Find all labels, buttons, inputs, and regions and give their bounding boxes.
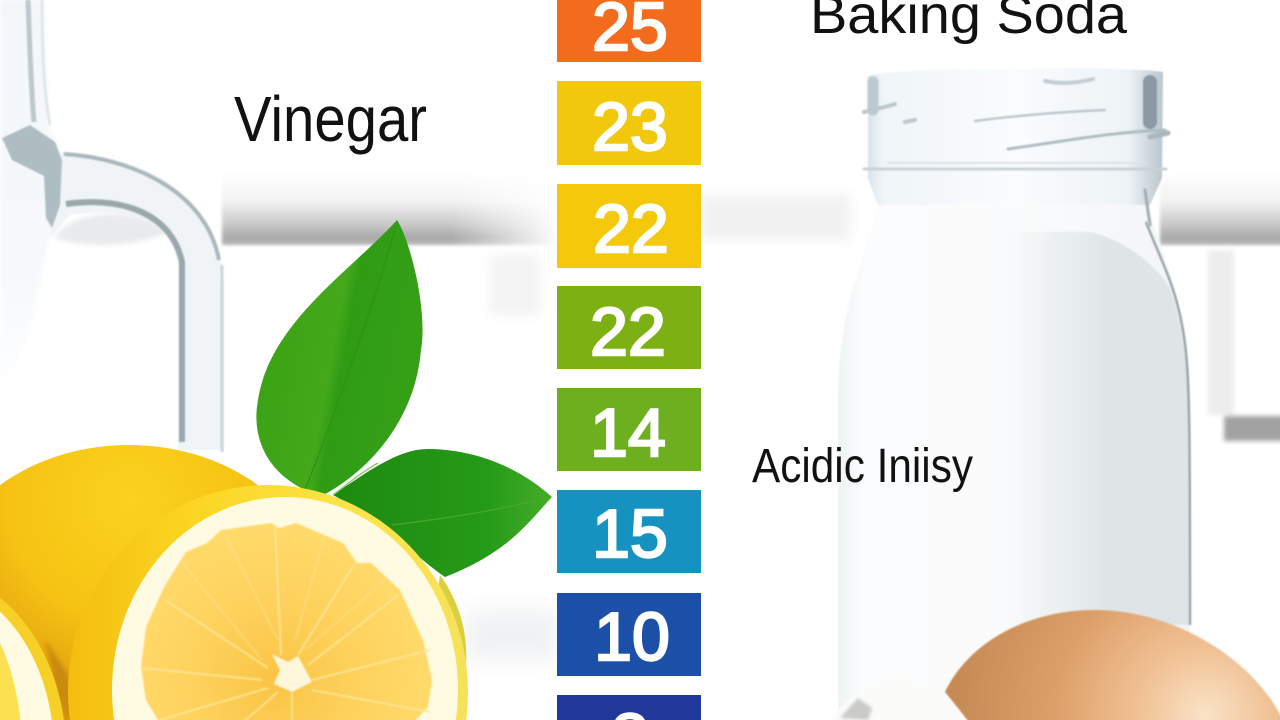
jar body bbox=[838, 205, 1190, 720]
scale block 22 yellow bbox=[557, 184, 701, 268]
icon: cut lemon half bbox=[68, 485, 468, 720]
vertical colour scale of numbers bbox=[557, 0, 701, 720]
icon: green leaves bbox=[256, 220, 552, 577]
scale block 15 bbox=[557, 490, 701, 573]
scale block 23: 23 bbox=[592, 89, 668, 165]
icon: glass jar of baking soda bbox=[838, 68, 1190, 720]
leaf: upper bbox=[256, 220, 423, 496]
scale block 22 green bbox=[557, 286, 701, 370]
callout text: Acidic Iniisy: Acidic Iniisy bbox=[752, 440, 973, 493]
scale block 22 green: 22 bbox=[590, 294, 666, 370]
leaf: right bbox=[333, 449, 552, 577]
icon: baking soda powder mound bbox=[828, 674, 975, 720]
scale block 10: 10 bbox=[594, 599, 670, 675]
baking soda powder shading bbox=[1000, 232, 1189, 625]
scale block 10 bbox=[557, 593, 701, 676]
scale block 22 yellow: 22 bbox=[593, 191, 669, 267]
heading label: Vinegar: Vinegar bbox=[234, 83, 427, 155]
icon: brown egg bbox=[945, 610, 1280, 720]
scale block 23 bbox=[557, 81, 701, 165]
lemon pith centre bbox=[272, 654, 312, 692]
icon: whole lemon bbox=[0, 445, 466, 720]
scale block partly cropped bbox=[557, 695, 701, 720]
scale block 14 bbox=[557, 388, 701, 471]
scale block 25 bbox=[557, 0, 701, 65]
scale block 14: 14 bbox=[590, 395, 666, 471]
lemon segment membranes bbox=[142, 525, 430, 720]
icon: glass vinegar carafe with handle bbox=[0, 0, 224, 452]
background: blurred kitchen shelves bbox=[220, 190, 1280, 658]
icon: lemon slice at left edge bbox=[0, 572, 66, 720]
scale block 15: 15 bbox=[592, 496, 668, 572]
jar neck and threads bbox=[864, 68, 1168, 225]
